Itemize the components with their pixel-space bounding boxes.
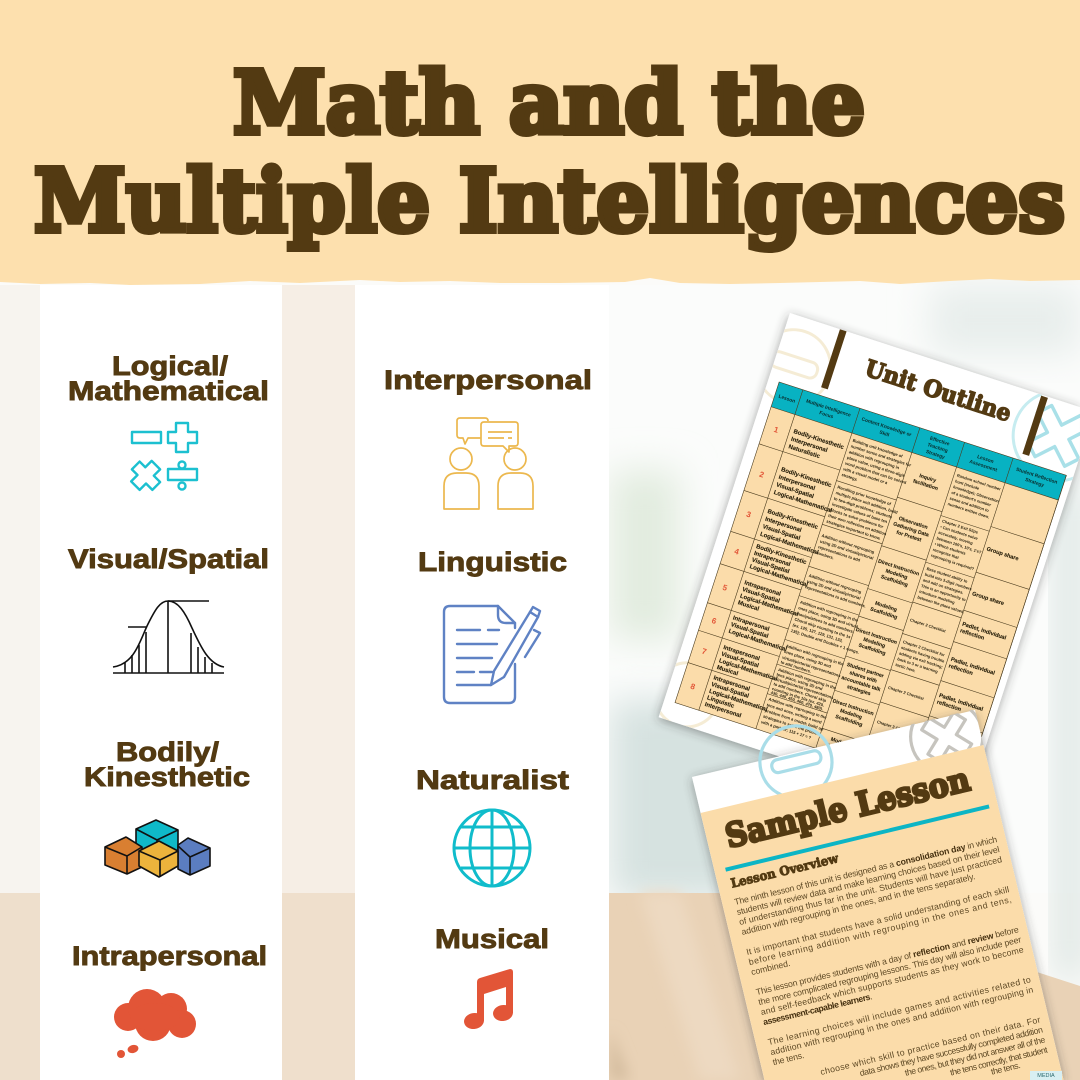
outline table: Padlet, individual (950, 657, 996, 677)
outline table: Interpersonal (764, 517, 802, 534)
lesson overview body text: and self-feedback which supports students as they work to become (760, 944, 1025, 1017)
icon: bell curve (113, 601, 224, 673)
lesson overview body text: before learning addition with regrouping in the ones and tens, (748, 894, 1013, 967)
outline table: Addition with regrouping in the (785, 643, 845, 667)
outline table: Base student ability to (926, 566, 969, 584)
outline table: Lesson (778, 394, 796, 405)
outline table: Linguistic (706, 695, 735, 710)
label: Logical/Mathematical: Logical/ (112, 351, 229, 381)
outline table: Padlet, individual (961, 622, 1007, 642)
label: Intrapersonal: Intrapersonal (72, 941, 267, 971)
outline table: tactic here. (895, 662, 916, 673)
title: Multiple Intelligences (34, 151, 1065, 252)
outline table: Logical-Mathematical (759, 532, 819, 556)
outline table: with a visual model or a (842, 466, 889, 486)
outline table: representations to add numbers. (804, 584, 867, 609)
outline table: Gathering Data (892, 521, 930, 539)
outline table: Direct Instruction (832, 698, 874, 717)
outline table: Musical (737, 600, 760, 613)
label: Bodily/Kinesthetic: Kinesthetic (84, 762, 250, 792)
outline table: virtual/pictorial representations (774, 676, 835, 700)
outline table: Lesson (976, 454, 994, 465)
outline table: reflection (924, 737, 950, 750)
outline table: with a partner; 115 + 17 = ? (760, 719, 812, 740)
outline table: Skill (878, 430, 891, 439)
outline table: Assessment (968, 459, 998, 474)
outline table: Random school number (956, 473, 1002, 492)
title: Math and the (233, 53, 865, 154)
outline table: counting in the 10s (ex. 420, (771, 686, 825, 708)
lesson overview body text: This lesson provides students with a day of reflection and review before (755, 924, 1020, 997)
outline table: Teaching (926, 442, 948, 454)
outline table: 3 (745, 510, 753, 520)
outline table: accurately, moving (938, 530, 974, 546)
outline table (675, 382, 1066, 796)
lesson overview body text: students will review data and make learning choices based on their level (736, 844, 1001, 917)
subheading: Lesson Overview (729, 850, 841, 891)
outline table: Interpersonal (778, 475, 816, 492)
outline table: Direct Instruction (855, 627, 898, 646)
outline table: accountable talk (841, 675, 881, 693)
outline table: Chapter 2 Checklist (887, 685, 925, 701)
label: Linguistic: Linguistic (418, 547, 567, 577)
outline table: to add numbers. Choral skip (773, 681, 827, 703)
outline table: for Pretest (895, 530, 922, 544)
sheet title: Unit Outline (862, 355, 1015, 427)
icon: stacked cubes (105, 820, 210, 877)
outline table: 2 (758, 470, 766, 480)
outline table: Visual-Spatial (741, 587, 781, 605)
outline table: virtual/pictorial representations (782, 655, 842, 678)
outline table: reflection (936, 700, 962, 713)
lesson overview body text: combined. (750, 958, 791, 977)
icon: circled times (909, 710, 984, 761)
outline table: Logical-Mathematical (773, 490, 833, 515)
outline table: 8 (689, 682, 697, 692)
lesson overview body text: It is important that students have a solid understanding of each skill (745, 884, 1010, 957)
outline table: 5 (721, 583, 729, 593)
outline table: Padlet, individual (938, 693, 984, 713)
outline table: Naturalistic (788, 444, 821, 460)
outline table: and add on strategies. (922, 577, 964, 595)
panel: Unit Outline sheet (654, 310, 1080, 762)
outline table: Visual-Spatial (762, 524, 801, 542)
outline table: Modeling (839, 708, 863, 721)
icon: thought cloud (114, 989, 196, 1058)
outline table: 135); Double and Doubles + 1 songs. (790, 628, 860, 655)
outline table: strategies to solve the problem (762, 714, 822, 737)
outline table: Chapter 2 Exit Slips (941, 518, 980, 535)
outline table: Strategy (1024, 477, 1045, 489)
icon: circled minus (753, 719, 839, 805)
outline table: Building unit knowledge of (852, 438, 904, 459)
outline table: Strategy (925, 449, 946, 461)
outline table: knowledge); Observation (953, 484, 1000, 504)
outline table: Logical-Mathematical (728, 629, 788, 653)
outline table: reflection (959, 628, 985, 642)
outline table: Addition with regrouping in the (778, 667, 838, 691)
outline table: blocks to solve problems for (829, 507, 884, 529)
lesson overview body text: The ninth lesson of this unit is designed as a consolidation day in which (733, 834, 998, 907)
outline table: of a student's number (951, 490, 992, 508)
outline table: Logical-Mathematical (749, 564, 809, 589)
outline table: addition with regrouping in (848, 449, 901, 470)
outline table: Chapter 3 Checklist (876, 719, 914, 736)
outline table: using 3D and virtual/pictorial (806, 579, 861, 601)
icon: globe (454, 810, 530, 886)
lesson overview body text: the tens. (990, 1060, 1021, 1077)
outline table: number sense and strategies for (850, 443, 912, 468)
icon: document and pen (444, 606, 540, 703)
outline table: Logical-Mathematical (739, 594, 799, 618)
outline table: between the place values. (917, 594, 965, 614)
outline table: Addition with regrouping in the (768, 696, 828, 720)
outline table: Scaffolding (834, 714, 863, 728)
blurred background photo (0, 279, 1080, 1080)
outline table: Interpersonal (704, 702, 742, 720)
outline table: Interpersonal (790, 437, 828, 454)
outline table: Visual-Spatial (710, 682, 750, 700)
corner tag: MEDIA (1037, 1073, 1055, 1079)
outline table: Logical-Mathematical (708, 689, 768, 713)
outline table: Scaffolding (825, 742, 854, 757)
outline table: shares with (848, 670, 877, 685)
lesson overview body text: assessment-capable learners. (762, 991, 873, 1027)
outline table: Visual-Spatial (751, 557, 790, 575)
outline table: build into 3-digit numbers (924, 572, 973, 592)
outline table: reflection (948, 663, 974, 677)
outline table: hunt (include (954, 478, 981, 491)
header banner with torn edge (0, 0, 1080, 285)
lesson overview body text: choose which skill to practice based on their data. For (819, 1014, 1041, 1077)
outline table: adding via exit tracking; (899, 651, 944, 669)
outline table: Addition without regrouping (821, 533, 875, 555)
outline table: investigate values of base ten (831, 501, 889, 524)
outline table: Modeling (830, 737, 853, 749)
outline table: Padlet, individual (926, 730, 972, 750)
outline table: Group share (986, 546, 1019, 562)
lesson overview body text: the tens. (772, 1050, 805, 1067)
outline table: Intrapersonal (732, 615, 770, 633)
outline table: Inquiry (918, 473, 937, 484)
outline table: Intrapersonal (722, 645, 761, 662)
outline table: their own reflection on addition (828, 513, 888, 537)
outline table: 430, 440, 450, 460, 470, 480). (770, 690, 824, 711)
outline table: Intrapersonal (712, 675, 751, 693)
label: Logical/Mathematical: Mathematical (68, 376, 269, 406)
beige content area (701, 745, 1064, 1080)
panel: middle intelligences column (355, 285, 609, 1080)
outline table: (ex. 125, 127, 129, 131, 133, (792, 622, 844, 643)
icon: music note (463, 969, 514, 1030)
outline table: This is an opportunity to (920, 583, 967, 602)
panel: Sample Lesson sheet (692, 694, 1064, 1080)
outline table: Scaffolding (858, 643, 886, 657)
outline table: • Can students solve (940, 524, 979, 541)
outline table: Bodily-Kinesthetic (755, 544, 808, 566)
outline table: Chapter 2 Checklist for (902, 639, 946, 658)
outline table: Bodily-Kinesthetic (793, 429, 845, 451)
outline table: representations to add (817, 544, 861, 563)
outline table: Content Knowledge or (861, 416, 912, 438)
outline table: Multiple Intelligence (805, 398, 852, 419)
outline table: strategies (846, 684, 871, 697)
outline table: Student partner (846, 662, 884, 680)
outline table: Scaffolding (880, 574, 909, 589)
lesson overview body text: the tens correctly, that student (949, 1044, 1049, 1078)
outline table: students having trouble (900, 645, 946, 664)
outline table: numbers written down. (947, 501, 990, 520)
label: Bodily/Kinesthetic (84, 737, 250, 792)
outline table: Bodily-Kinesthetic (780, 467, 833, 489)
lesson overview body text: addition with regrouping in the ones, and in the tens separately. (740, 871, 976, 937)
outline table: regrouping is required? (930, 553, 975, 571)
outline table: word problem that can be solved (844, 460, 907, 485)
outline table: 4 (733, 547, 741, 557)
panel: left intelligences column (40, 285, 282, 1080)
outline table: Intrapersonal (743, 580, 782, 598)
outline table: multiple place unit addition, build (835, 490, 899, 515)
outline table: place value, using a three-digit (846, 455, 906, 478)
outline table: problem from a model; build up (764, 708, 825, 732)
label: Visual/Spatial: Visual/Spatial (68, 544, 269, 574)
outline table: Chapter 2 Checklist (909, 617, 947, 634)
outline table: Modeling (862, 637, 886, 650)
outline table: Recalling prior knowledge of (837, 484, 892, 507)
title (34, 53, 1065, 252)
label: Interpersonal: Interpersonal (384, 365, 592, 395)
outline table: facilitation (912, 478, 939, 492)
lesson overview body text (733, 834, 1051, 1080)
outline table: Addition with regrouping in the (799, 599, 859, 623)
outline table: Addition without regrouping (808, 573, 862, 595)
outline table: Direct Instruction (877, 559, 920, 578)
outline table: Intrapersonal (753, 551, 791, 568)
outline table: numbers. (816, 550, 835, 560)
outline table: recognize that (932, 547, 960, 560)
outline table: ones place, using 3D and (783, 649, 832, 669)
outline table: Visual-Spatial (720, 652, 760, 670)
outline table: • Which students (934, 541, 967, 556)
lesson overview body text: data shows they have successfully completed addition (859, 1024, 1044, 1078)
label: Logical/Mathematical (68, 351, 269, 406)
outline table: strategies important to know. (826, 519, 881, 541)
outline table: strategy. (841, 472, 858, 482)
label: Musical: Musical (435, 924, 549, 954)
lesson overview body text: The learning choices will include games and activities related to (767, 974, 1032, 1047)
outline table: Focus (818, 410, 834, 420)
outline table: ones place, using 3D and virtual (798, 605, 859, 629)
outline table: Visual-Spatial (730, 622, 769, 640)
outline table: back to 3 or a learning (897, 656, 939, 674)
outline table: 6 (711, 616, 718, 626)
lesson overview body text: the more complicated regrouping lessons. This day will also include peer (757, 934, 1022, 1007)
sheet title: Sample Lesson (721, 759, 974, 856)
icon: math operators (125, 423, 197, 496)
decorative bars (824, 330, 1045, 455)
outline table: introduce modeling (919, 589, 956, 605)
outline table: Choral skip counting to the 1s (794, 617, 852, 640)
corner tag (1030, 1071, 1062, 1080)
outline table: Logical-Mathematical (718, 658, 778, 683)
outline table: manipulatives to add numbers. (796, 611, 855, 634)
outline table: Observation (898, 516, 928, 531)
outline table: using 3D and virtual/pictorial (819, 539, 874, 561)
outline table: between 100's, 10's, 1's? (936, 535, 983, 555)
icon: two people talking (444, 418, 533, 509)
lesson overview body text: the ones, but they did not answer all of the (904, 1034, 1046, 1078)
outline table: 7 (701, 647, 708, 657)
outline table: Scaffolding (869, 606, 898, 621)
outline table: Effective (929, 436, 950, 448)
outline table: 1 (773, 425, 780, 435)
outline table: Bodily-Kinesthetic (767, 509, 819, 531)
lesson overview body text: addition with regrouping in the ones and addition with regrouping in (769, 984, 1034, 1057)
sheet heading block (714, 756, 994, 891)
label: Bodily/Kinesthetic: Bodily/ (116, 737, 220, 767)
sheet paper (692, 710, 1064, 1080)
outline table: to two-digit problems; students (833, 496, 894, 520)
outline table: Musical (716, 665, 739, 677)
outline table: tens and ones, writing a word (766, 702, 823, 725)
teal rule (725, 805, 990, 872)
outline table: tens place, using 3D and (776, 672, 824, 691)
outline table: sense and addition to (949, 496, 990, 513)
outline table: Student Reflection (1015, 467, 1058, 486)
label: Naturalist: Naturalist (416, 765, 569, 795)
outline table: Modeling (885, 568, 908, 581)
outline table: Visual-Spatial (775, 482, 815, 500)
lesson overview body text: of understanding thus far in the unit. Students will have just practiced (738, 854, 1003, 927)
outline table: Modeling (874, 601, 898, 613)
outline table: to add numbers. (780, 659, 812, 674)
outline table: Group share (971, 591, 1005, 607)
